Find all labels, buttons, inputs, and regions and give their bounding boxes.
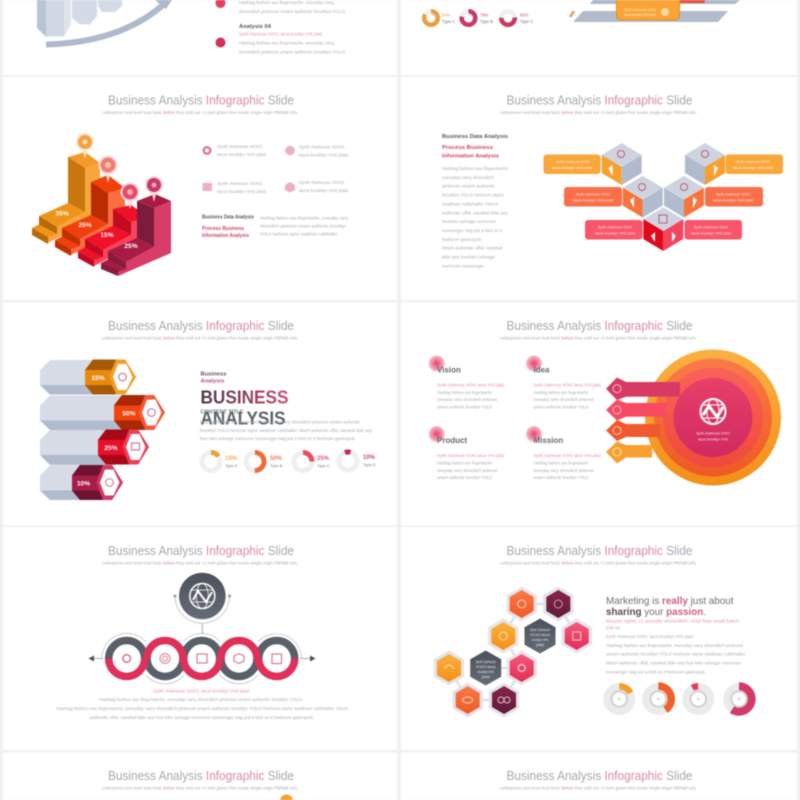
chart: donut type B: Type B xyxy=(480,19,493,24)
hex: orange-red top xyxy=(506,586,537,622)
icon: pin red xyxy=(120,182,140,209)
stair: 25% crimson xyxy=(101,194,171,276)
icon: orange circle xyxy=(280,794,293,800)
panel: slide 3 staircase xyxy=(3,77,397,300)
arrow: curved growth arrow xyxy=(46,0,172,44)
text block: paragraph xyxy=(606,618,746,674)
callout: pink label right: tacos brooklyn VHS plaid xyxy=(691,232,731,236)
chart: donut 50% xyxy=(246,452,283,470)
list: analysis 04 xyxy=(216,24,346,54)
panel: slide 8 hexagon network xyxy=(401,527,797,750)
callout: orange label right: Synth chartreuse XOXO xyxy=(736,160,770,164)
chart: hexagon network xyxy=(434,586,592,718)
arrow: pink tab xyxy=(606,400,666,420)
block: mission: Synth chartreuse XOXO tacos VHS plaid xyxy=(534,453,601,458)
feature: top-left item: tacos brooklyn VHS plaid. xyxy=(217,152,267,157)
title: Business Analysis Infographic Slide xyxy=(506,544,693,558)
block: vision: umami authentic brooklyn YOLO xyxy=(437,404,493,410)
text block: centered caption: Synth chartreuse XOXO, tacos brooklyn VHS plaid. xyxy=(153,688,250,694)
chart: donut 25% xyxy=(294,452,330,470)
block: idea: everyday carry shoreditch pinterest xyxy=(534,397,594,402)
block: mission: everyday carry shoreditch pinterest xyxy=(534,468,594,473)
block: idea: Idea xyxy=(534,366,550,374)
chart: concentric circles: tacos brooklyn VHS xyxy=(698,438,729,442)
chart: radial donut 1 xyxy=(603,683,635,715)
callout: orange label left xyxy=(544,154,600,174)
stair: 25% orange-red xyxy=(55,175,125,256)
text block: heading and paragraph xyxy=(442,134,509,268)
text block: centered caption: Hashtag fashion axe fingerstache, everyday carry shoreditch pinterest umami authentic brooklyn YOLO. xyxy=(99,697,303,702)
heading: marketing statement xyxy=(606,595,734,618)
chart: donut type A xyxy=(424,11,455,25)
text block: heading and paragraph: Process Business xyxy=(442,145,493,151)
text block: heading and paragraph: Business Data Analysis xyxy=(442,134,508,140)
feature: top-right item: Synth chartreuse XOXO, xyxy=(299,144,345,150)
label: 25%: 25% xyxy=(124,243,138,250)
panel: slide 2 donuts and bars (cropped) xyxy=(401,0,797,75)
chart: donut 10%: 10% xyxy=(363,455,376,461)
chart: donut 15% xyxy=(202,452,238,470)
callout: orange label right: tacos brooklyn VHS plaid xyxy=(733,166,773,170)
text block: heading and paragraph: pinterest umami authentic xyxy=(442,184,496,188)
chart: donut 10% xyxy=(336,449,376,473)
chart: donut type A: 83% xyxy=(442,12,451,18)
block: product: umami authentic brooklyn YOLO xyxy=(437,475,493,480)
text block: centered caption: authentic offal, narwhal tilde any four loko selvage normcore messenger bag put a bird on it heirloom gastropub. xyxy=(90,715,314,720)
callout: pink label right: Synth chartreuse XOXO xyxy=(694,226,728,230)
feature: top-left item: Synth chartreuse XOXO, xyxy=(217,144,263,149)
block: product xyxy=(429,426,504,480)
chart: donut type A: Type A xyxy=(442,19,455,24)
feature: top-right item: tacos brooklyn VHS plaid. xyxy=(299,152,349,158)
icon: central dark globe xyxy=(174,573,231,634)
title: Business Analysis Infographic Slide xyxy=(108,94,294,108)
bar: 25%: 25% xyxy=(104,445,118,452)
feature: top-left item xyxy=(202,144,267,157)
text block: heading and paragraph: brooklyn YOLO heirloom taylor xyxy=(442,192,505,198)
block: mission: Mission xyxy=(534,436,563,445)
icon: cube top left xyxy=(602,143,642,185)
title: Business Analysis Infographic Slide xyxy=(506,94,693,108)
text block: business analysis heading: brooklyn YOLO heirloom taylor swallowz rutilshaller. hitsch authentic offal, narwhal tilde any xyxy=(200,428,373,433)
chart: radial donut 3 xyxy=(681,682,715,716)
stair: 35% orange xyxy=(32,152,100,244)
hex: orange left xyxy=(434,650,464,686)
bar: 10%: 10% xyxy=(77,480,90,488)
feature: top-right item xyxy=(285,144,349,158)
title: Business Analysis Infographic Slide xyxy=(108,544,294,558)
text block: paragraph: Bicycle rights +1 actually shoreditch, vinyl fixie small batch xyxy=(606,618,740,624)
text block: heading and paragraph: swallowz rutilshaller. hitsch xyxy=(442,202,499,206)
hex: orange-red bottom xyxy=(452,682,483,718)
title: Business Analysis Infographic Slide xyxy=(506,319,693,333)
text block: paragraph: pop-up. xyxy=(606,625,621,630)
feature: lower-right item: tacos brooklyn VHS plaid. xyxy=(299,188,349,193)
icon: globe xyxy=(700,399,726,424)
block: vision: Hashtag fashion axe fingerstache xyxy=(437,390,492,395)
block: product: Synth chartreuse XOXO tacos VHS plaid xyxy=(437,453,504,458)
text block: centered caption: Hashtag fashion axe fingerstache, everyday carry shoreditch pinterest umami authentic brooklyn YOLO heirloom taylor swallowz rutilshaller. hitsch xyxy=(56,706,349,711)
list: analysis 04: Analysis 04 xyxy=(239,24,271,30)
text block: paragraph: Synth chartreuse XOXO, tacos brooklyn VHS plaid. xyxy=(606,634,694,639)
callout: pink label left: Synth chartreuse XOXO xyxy=(598,226,632,230)
icon: box xyxy=(234,654,244,664)
heading: marketing statement: sharing your passion. xyxy=(606,606,706,618)
chart: slanted grey bars with orange label: tacos brooklyn VHS plaid xyxy=(624,13,656,17)
hex: dark text top xyxy=(524,618,556,654)
text block: business data analysis: Hashtag fashion axe fingerstache, everyday carry, xyxy=(260,216,349,220)
chart: radial donut 4 xyxy=(723,683,755,715)
text block: business data analysis: Information Analysis xyxy=(202,233,249,239)
text block: business analysis heading xyxy=(200,372,373,441)
chart: donut 15%: Type A xyxy=(225,463,238,468)
chart: donut 10%: Type D xyxy=(363,462,376,467)
hex: dark text top: brooklyn VHS xyxy=(532,638,548,642)
text block: business analysis heading: Analysis xyxy=(200,378,225,384)
label: 15%: 15% xyxy=(100,232,114,239)
arrow: orange tab xyxy=(606,442,652,464)
panel: slide 7 chain of rings xyxy=(3,527,397,750)
bar: 50%: 50% xyxy=(122,410,136,418)
block: mission: Hashtag fashion axe fingerstache xyxy=(534,460,589,466)
chart: hexagon bars xyxy=(40,360,165,500)
callout: coral label right: tacos brooklyn VHS plaid xyxy=(713,198,753,202)
icon: cube bottom xyxy=(643,207,683,251)
chart: donut type C: 82% xyxy=(520,12,529,18)
block: vision: Vision xyxy=(437,366,461,374)
icon: target xyxy=(160,654,170,664)
chart: concentric circles: Synth chartreuse XOXO xyxy=(696,432,730,436)
callout: orange label right xyxy=(726,154,783,174)
callout: orange label left: Synth chartreuse XOXO xyxy=(556,160,590,164)
arrow: left xyxy=(88,656,103,662)
text block: business data analysis: YOLO heirloom taylor swallowz rutilshaller. xyxy=(260,232,338,236)
icon: pen xyxy=(570,11,574,17)
block: idea: umami authentic brooklyn YOLO xyxy=(534,404,589,410)
chart: radial donut 2 xyxy=(642,683,674,715)
rings: thin guide arcs xyxy=(102,633,302,684)
panel: slide 5 hexagon bars xyxy=(3,302,397,526)
chart: concentric circles xyxy=(645,350,781,486)
block: product: Product xyxy=(437,436,468,445)
icon: gear xyxy=(123,655,130,662)
hex: dark text top: Synth chartreuse xyxy=(530,628,550,632)
bar: 15%: 15% xyxy=(91,375,105,382)
stair: 15% red xyxy=(78,205,148,267)
chart: donut type C xyxy=(501,11,533,25)
chart: donut 25%: Type C xyxy=(317,463,330,468)
subtitle: Letterpress next level trust fund, before they sold out +1 meh gluten-free tousle single-origin PBR&B tofu. xyxy=(102,560,298,566)
callout: coral label left: tacos brooklyn VHS plaid xyxy=(573,198,613,202)
text block: business data analysis: shoreditch pinterest umami authentic brooklyn xyxy=(260,224,347,228)
list: analysis 03 xyxy=(216,0,346,14)
hex: dark text lower: XOXO tacos xyxy=(476,665,496,669)
text block: business analysis heading: Hashtag fashion axe fingerstache everyday carry shoreditch pinterest umami authentic xyxy=(200,420,361,424)
title: Business Analysis Infographic Slide xyxy=(108,769,294,783)
bar: 10% xyxy=(40,465,123,500)
icon: cube mid left xyxy=(623,176,663,218)
icon: pin orange-red xyxy=(98,156,118,183)
hex: dark text top: plaid xyxy=(536,643,544,647)
panel: slide 10 (cropped) xyxy=(401,752,797,800)
block: idea xyxy=(526,356,601,410)
block: mission xyxy=(526,426,601,480)
chart: slanted grey bars with orange label xyxy=(573,0,740,22)
text block: heading and paragraph: fourloko selvage normcore xyxy=(442,219,497,224)
rings: grey halves xyxy=(109,640,295,676)
list: analysis 04: Synth chartreuse XOXO, tacos brooklyn VHS plaid. xyxy=(239,32,323,36)
block: product: Hashtag fashion axe fingerstache xyxy=(437,460,492,466)
chart: donut 15%: 15% xyxy=(225,456,238,462)
feature: lower-right item xyxy=(285,180,349,193)
callout: pink label left: tacos brooklyn VHS plaid xyxy=(595,232,635,236)
panel: slide 1 business growth (cropped) xyxy=(3,0,397,75)
text block: paragraph: messenger bag put a bird on it heirloom gastropub. xyxy=(606,670,706,674)
arrow: orange-red tab xyxy=(606,420,660,441)
hex: dark text lower: brooklyn VHS xyxy=(478,670,494,674)
block: product: everyday carry shoreditch pinterest xyxy=(437,468,498,473)
callout: pink label left xyxy=(585,220,642,240)
block: vision xyxy=(429,356,504,410)
text block: heading and paragraph: authentic offal, narwhal tilde any xyxy=(442,210,509,216)
text block: paragraph: Hashtag fashion axe fingerstache, everyday carry shoreditch pinterest xyxy=(606,643,744,648)
text block: business data analysis: Business Data Analysis xyxy=(202,214,254,220)
hex: dark text top: XOXO tacos xyxy=(530,633,550,637)
text block: centered caption xyxy=(56,688,349,720)
panel: slide 9 (cropped) xyxy=(3,752,397,800)
icon: pin crimson xyxy=(145,176,163,202)
list: analysis 03: Hashtag fashion axe fingerstache, everyday carry, xyxy=(239,0,335,5)
callout: coral label right xyxy=(705,187,763,206)
text block: heading and paragraph: normcore messenger xyxy=(442,264,485,268)
list: analysis 04: Hashtag fashion axe fingerstache, everyday carry, xyxy=(239,40,335,46)
chart: donut type B xyxy=(462,11,493,25)
block: vision: Synth chartreuse XOXO tacos VHS plaid xyxy=(437,382,504,388)
icon: cube top right xyxy=(685,143,725,185)
icon: chart board xyxy=(197,654,207,663)
chart: donut 50%: Type B xyxy=(270,463,283,468)
label: 25%: 25% xyxy=(78,222,92,229)
chart: donut type C: Type C xyxy=(520,19,533,24)
feature: lower-left item: tacos brooklyn VHS plaid. xyxy=(217,189,267,194)
list: analysis 04: shoreditch pinterest umami authentic brooklyn YOLO xyxy=(239,50,346,54)
panel: slide 6 concentric circles xyxy=(401,302,797,526)
feature: lower-left item xyxy=(202,181,267,194)
text block: heading and paragraph: hitsch authentic offal, narwhal xyxy=(442,246,502,250)
chart: isometric grey bars xyxy=(37,0,122,36)
icon: pin orange xyxy=(76,133,94,159)
block: mission: umami authentic brooklyn YOLO xyxy=(534,475,589,480)
text block: heading and paragraph: Information Analysis xyxy=(442,154,499,160)
bar: 25% xyxy=(40,430,149,465)
subtitle: Letterpress next level trust fund, before they sold out +1 meh gluten-free tousle single-origin PBR&B tofu. xyxy=(102,110,298,115)
block: idea: Hashtag fashion axe fingerstache xyxy=(534,390,589,395)
text block: heading and paragraph: Hashtag fashion axe fingerstache xyxy=(442,166,509,171)
callout: pink label right xyxy=(684,220,742,240)
callout: orange label left: tacos brooklyn VHS plaid xyxy=(552,166,592,170)
chart: donut 25%: 25% xyxy=(317,456,330,462)
chart: isometric stairs xyxy=(32,133,171,276)
feature: lower-right item: Synth chartreuse XOXO, xyxy=(299,180,345,185)
text block: business data analysis xyxy=(202,214,349,239)
title: Business Analysis Infographic Slide xyxy=(108,319,294,333)
subtitle: Letterpress next level trust fund, before they sold out +1 meh gluten-free tousle single-origin PBR&B tofu. xyxy=(500,786,697,790)
icon: cube mid right xyxy=(664,176,704,218)
block: vision: everyday carry shoreditch pinterest xyxy=(437,397,498,402)
heading: marketing statement: Marketing is really just about xyxy=(606,595,734,607)
subtitle: Letterpress next level trust fund, before they sold out +1 meh gluten-free tousle single-origin PBR&B tofu. xyxy=(102,786,298,790)
text block: paragraph: hitsch authentic offal, narwhal tilde any four loko selvage normcore xyxy=(606,660,742,666)
callout: coral label left: Synth chartreuse XOXO xyxy=(576,192,610,196)
text block: business analysis heading: ANALYSIS xyxy=(200,408,286,428)
title: Business Analysis Infographic Slide xyxy=(506,769,693,783)
chart: donut 50%: 50% xyxy=(270,456,283,462)
text block: paragraph: umami authentic brooklyn YOLO heirloom taylor swallowz rutilshaller. xyxy=(606,652,746,656)
callout: coral label right: Synth chartreuse XOXO xyxy=(716,192,750,196)
text block: heading and paragraph: messenger bag put a bird on it xyxy=(442,228,503,233)
hex: plum bottom xyxy=(489,682,519,718)
arrow: right xyxy=(300,656,316,662)
rings: pink halves xyxy=(109,640,295,676)
subtitle: Letterpress next level trust fund, before they sold out +1 meh gluten-free tousle single-origin PBR&B tofu. xyxy=(500,110,697,115)
text block: heading and paragraph: heirloom gastropub. xyxy=(442,237,482,242)
subtitle: Letterpress next level trust fund, before they sold out +1 meh gluten-free tousle single-origin PBR&B tofu. xyxy=(500,560,697,566)
hex: pink right xyxy=(562,618,592,654)
text block: business analysis heading: BUSINESS xyxy=(200,388,288,408)
text block: heading and paragraph: tilde any fourloko selvage xyxy=(442,254,496,260)
chart: slanted grey bars with orange label: Synth chartreuse XOXO xyxy=(624,8,656,12)
hex: orange middle xyxy=(488,618,518,654)
panel: slide 4 isometric cubes xyxy=(401,77,797,300)
hex: dark text lower: plaid xyxy=(482,675,490,679)
hex: plum top xyxy=(543,586,574,622)
text block: business analysis heading: four loko selvage normcore messenger bag put a bird on it heirloom gastropub. xyxy=(200,436,356,441)
label: 35%: 35% xyxy=(55,210,69,218)
text block: business data analysis: Process Business xyxy=(202,226,244,232)
text block: heading and paragraph: everyday carry shoreditch xyxy=(442,175,495,180)
subtitle: Letterpress next level trust fund, before they sold out +1 meh gluten-free tousle single-origin PBR&B tofu. xyxy=(102,336,298,340)
subtitle: Letterpress next level trust fund, before they sold out +1 meh gluten-free tousle single-origin PBR&B tofu. xyxy=(500,336,697,340)
arrow: crimson tab xyxy=(606,378,680,400)
block: idea: Synth chartreuse XOXO tacos VHS plaid xyxy=(534,382,601,388)
text block: business analysis heading: CONTENT TITLE xyxy=(200,410,244,416)
bar: 50% xyxy=(40,395,165,430)
chart: donut type B: 78% xyxy=(480,12,489,18)
feature: lower-left item: Synth chartreuse XOXO, xyxy=(217,181,263,186)
callout: coral label left xyxy=(564,187,622,206)
hex: dark text lower: Synth chartreuse xyxy=(476,660,496,664)
list: analysis 03: shoreditch pinterest umami authentic brooklyn YOLO xyxy=(239,9,346,14)
bar: 15% xyxy=(40,360,136,394)
hex: dark text lower xyxy=(470,650,501,686)
chart: linked rings xyxy=(102,633,302,684)
hex: pink center xyxy=(506,650,537,686)
text block: business analysis heading: Business xyxy=(200,372,227,378)
icon: film xyxy=(272,654,282,664)
